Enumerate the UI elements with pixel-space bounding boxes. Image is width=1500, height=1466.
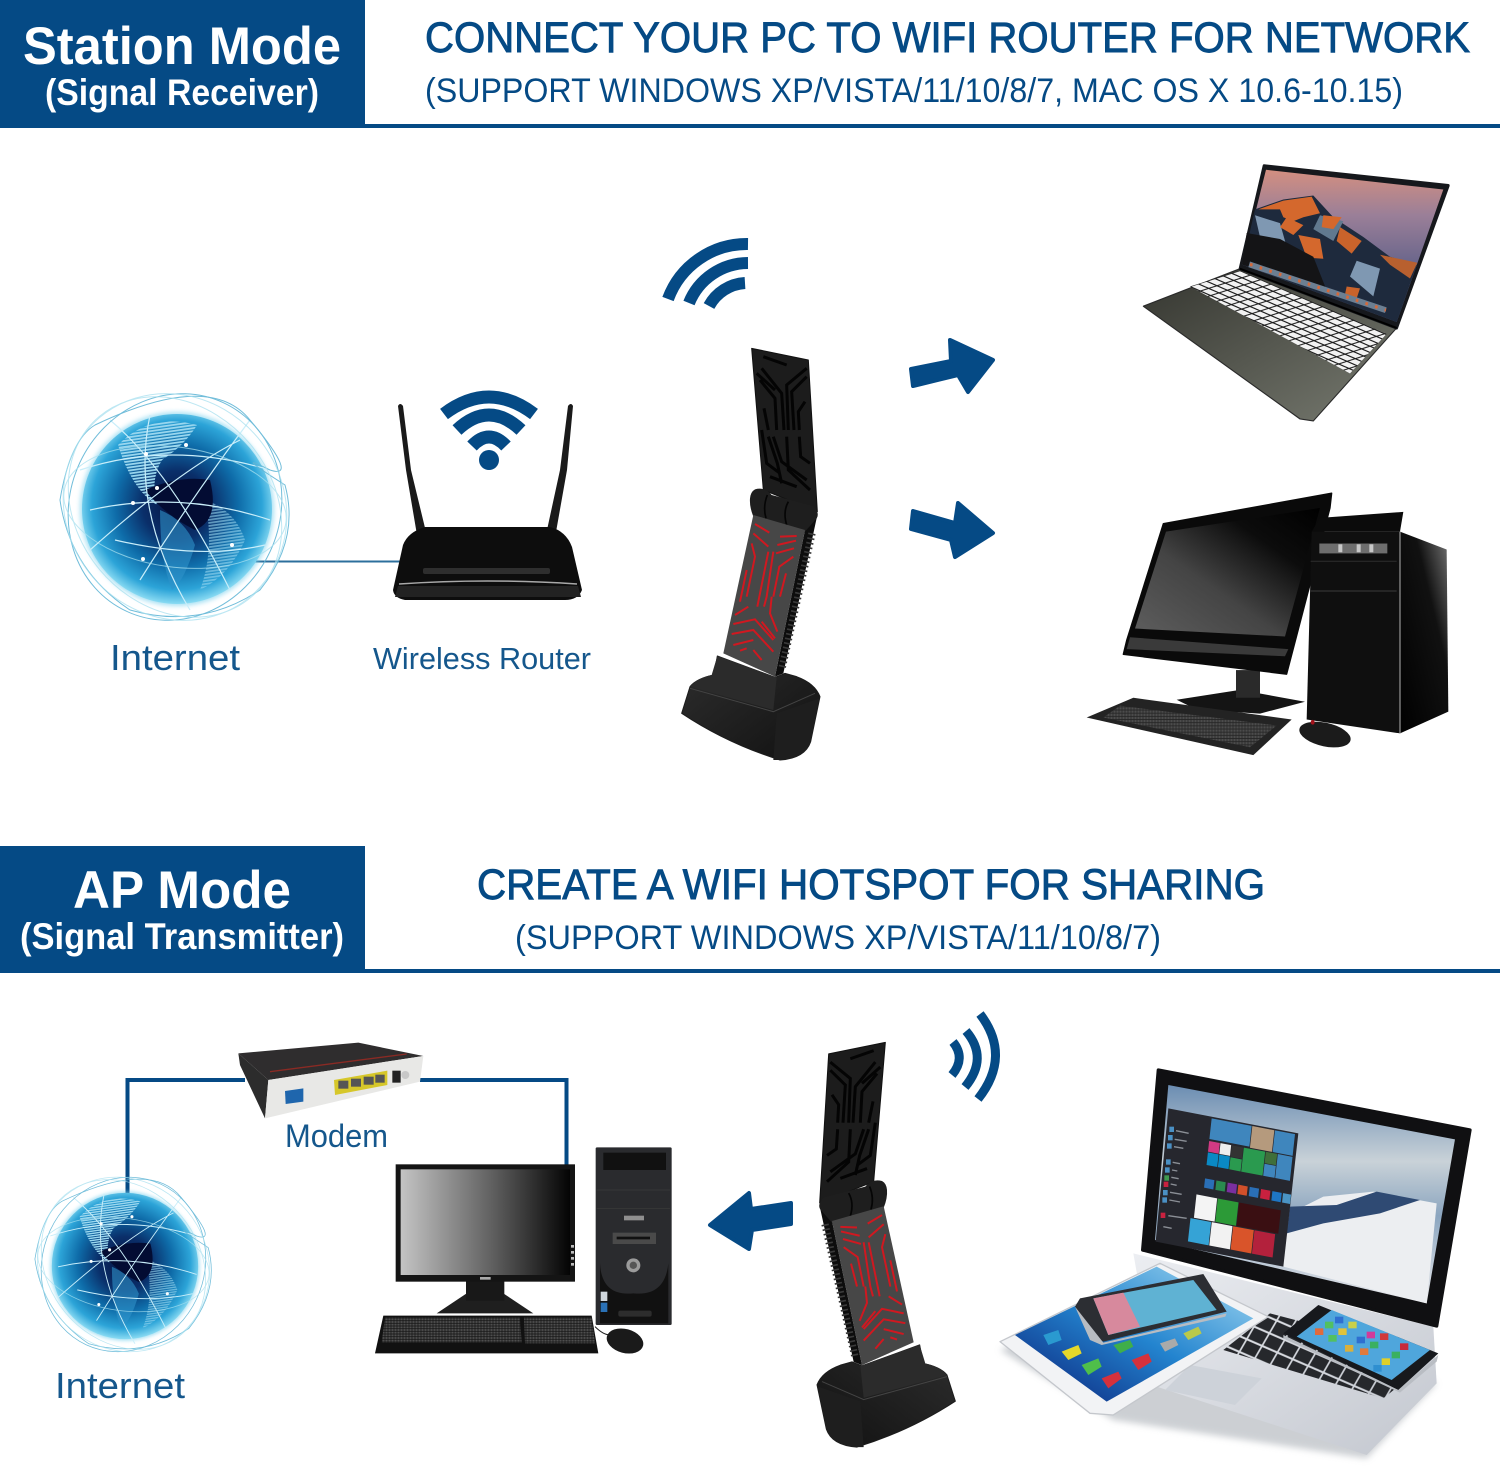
icon: adapter wifi signal — [952, 1014, 996, 1099]
mode badge: Station Mode: (Signal Receiver) — [45, 72, 319, 113]
USB wifi adapter on base — [817, 1042, 955, 1447]
arrow: to desktop — [911, 503, 993, 557]
label: Modem: Modem — [285, 1118, 388, 1154]
icon: internet globe — [2, 1142, 245, 1387]
connection line: globe to router — [250, 560, 400, 562]
USB wifi adapter on base — [682, 348, 820, 760]
subheadline: supported systems: (SUPPORT WINDOWS XP/VISTA/11/10/8/7) — [515, 919, 1161, 957]
illustration: laptop — [1143, 166, 1448, 421]
icon: router wifi signal — [444, 397, 534, 470]
mode badge: Station Mode — [0, 0, 365, 126]
illustration: laptop, tablet and phones — [1000, 1070, 1470, 1458]
laptop screen — [1143, 1070, 1470, 1326]
label: Internet: Internet — [55, 1365, 185, 1406]
laptop keyboard — [1223, 1313, 1435, 1398]
tablet — [1000, 1263, 1268, 1415]
start menu list — [1161, 1127, 1174, 1218]
illustration: desktop computer — [1087, 493, 1448, 755]
header: Station Mode — [0, 0, 1500, 128]
subheadline: supported systems: (SUPPORT WINDOWS XP/VISTA/11/10/8/7, MAC OS X 10.6-10.15) — [425, 72, 1403, 110]
header bar rule — [0, 969, 1500, 973]
arrow: to laptop — [911, 340, 993, 392]
icon: internet globe — [17, 348, 333, 666]
trackpad — [1165, 1365, 1262, 1405]
header: AP Mode — [0, 846, 1500, 973]
mode badge: AP Mode: AP Mode — [73, 861, 291, 920]
start menu tiles — [1188, 1116, 1298, 1260]
phone on tablet — [1075, 1274, 1227, 1345]
mode badge: AP Mode: (Signal Transmitter) — [20, 916, 344, 957]
mode badge: AP Mode — [0, 846, 365, 971]
headline: create a hotspot: CREATE A WIFI HOTSPOT FOR SHARING — [477, 861, 1265, 909]
connection line: modem to PC — [420, 1080, 566, 1166]
laptop deck — [1133, 1253, 1437, 1455]
icon: adapter wifi signal — [668, 244, 748, 306]
connection line: globe to modem — [128, 1080, 245, 1200]
header bar rule — [0, 124, 1500, 128]
shadow — [1000, 1280, 1437, 1458]
illustration: desktop PC — [375, 1147, 672, 1357]
illustration: modem — [238, 1043, 423, 1118]
mode badge: Station Mode: Station Mode — [23, 17, 341, 76]
arrow: adapter to PC — [710, 1193, 791, 1249]
label: Internet: Internet — [110, 637, 240, 678]
phone on keyboard — [1283, 1305, 1438, 1393]
label: Wireless Router: Wireless Router — [373, 641, 591, 676]
icon: wireless router — [393, 404, 582, 600]
